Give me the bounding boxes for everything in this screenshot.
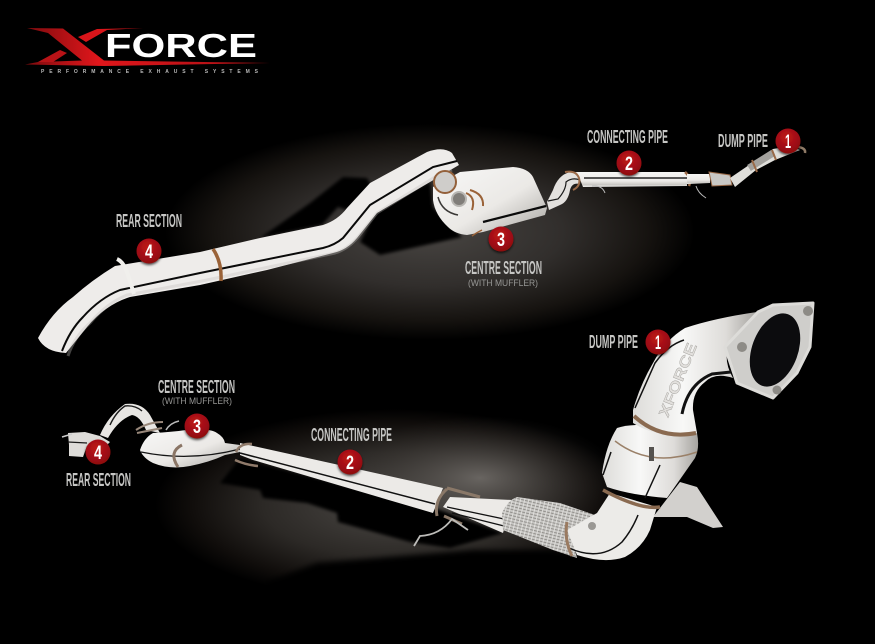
badge: upper 1: 1 bbox=[785, 132, 791, 153]
logo bbox=[25, 27, 270, 75]
lower cast shadow bbox=[220, 458, 503, 548]
labels: upper system: CONNECTING PIPE bbox=[587, 127, 668, 147]
lower glow highlight bbox=[340, 416, 620, 540]
lower connecting pipe bbox=[235, 443, 512, 546]
labels: upper system bbox=[116, 127, 768, 289]
badge: lower 2: 2 bbox=[346, 453, 354, 474]
lower catalytic section bbox=[602, 425, 698, 507]
lower glow bbox=[155, 409, 635, 601]
logo tagline: PERFORMANCE EXHAUST SYSTEMS bbox=[41, 69, 259, 75]
badge: lower 2 bbox=[338, 450, 362, 474]
logo wordmark: FORCE bbox=[105, 27, 257, 64]
lower floor shadow bbox=[267, 550, 640, 620]
upper exhaust system bbox=[38, 146, 805, 356]
lower muffler bbox=[136, 421, 240, 467]
badge: lower 1 bbox=[646, 330, 670, 354]
upper dump pipe bbox=[730, 146, 805, 187]
lower flex section bbox=[502, 497, 595, 558]
rear weld bbox=[213, 249, 221, 281]
labels: upper system: REAR SECTION bbox=[116, 211, 182, 231]
label: with muffler: (WITH MUFFLER) bbox=[468, 278, 538, 289]
upper hanger wires bbox=[592, 186, 706, 198]
badge: upper 4: 4 bbox=[145, 242, 153, 263]
upper connecting pipe bbox=[565, 172, 732, 198]
lower exhaust system bbox=[62, 303, 813, 620]
labels: lower system: REAR SECTION bbox=[66, 470, 131, 490]
badge: upper 1 bbox=[776, 128, 800, 154]
labels: lower system: CONNECTING PIPE bbox=[311, 425, 392, 445]
label: dump pipe: DUMP PIPE bbox=[718, 131, 768, 151]
badge: lower 3: 3 bbox=[193, 417, 201, 438]
lower pipe flange bbox=[436, 488, 480, 524]
stamped logo: XFORCE bbox=[656, 341, 701, 419]
labels: upper system: CENTRE SECTION bbox=[465, 258, 542, 278]
text: DUMP PIPE bbox=[589, 332, 638, 352]
badge: lower 3 bbox=[184, 414, 210, 438]
logo red X bbox=[25, 28, 270, 66]
badge: upper 3 bbox=[488, 226, 514, 252]
label: with muffler: (WITH MUFFLER) bbox=[162, 396, 232, 407]
lower hanger wire bbox=[414, 519, 468, 546]
lower dump pipe bend bbox=[633, 312, 757, 435]
badge: lower 4 bbox=[86, 440, 110, 464]
badge: lower 4: 4 bbox=[94, 443, 102, 464]
lower rear tail pipe bbox=[62, 404, 160, 457]
badge: upper 4 bbox=[136, 238, 162, 264]
lower mounting bracket bbox=[653, 482, 723, 528]
upper flex section bbox=[709, 172, 732, 186]
upper glow bbox=[165, 124, 695, 340]
upper rear section pipe bbox=[38, 149, 459, 356]
badge: upper 2 bbox=[616, 150, 642, 176]
upper cast shadow bbox=[260, 177, 462, 255]
badge: lower 1: 1 bbox=[655, 333, 661, 354]
labels: lower system bbox=[66, 332, 638, 490]
badge: upper 2: 2 bbox=[625, 154, 633, 175]
badge: upper 3: 3 bbox=[497, 230, 505, 251]
labels: lower system: CENTRE SECTION bbox=[158, 377, 235, 397]
rear clamp bbox=[117, 259, 134, 294]
muffler welds and ports bbox=[434, 171, 456, 193]
lower flange bbox=[725, 303, 813, 398]
upper muffler bbox=[433, 167, 547, 236]
upper bend pipe bbox=[547, 172, 580, 210]
lower elbow bbox=[566, 493, 657, 560]
